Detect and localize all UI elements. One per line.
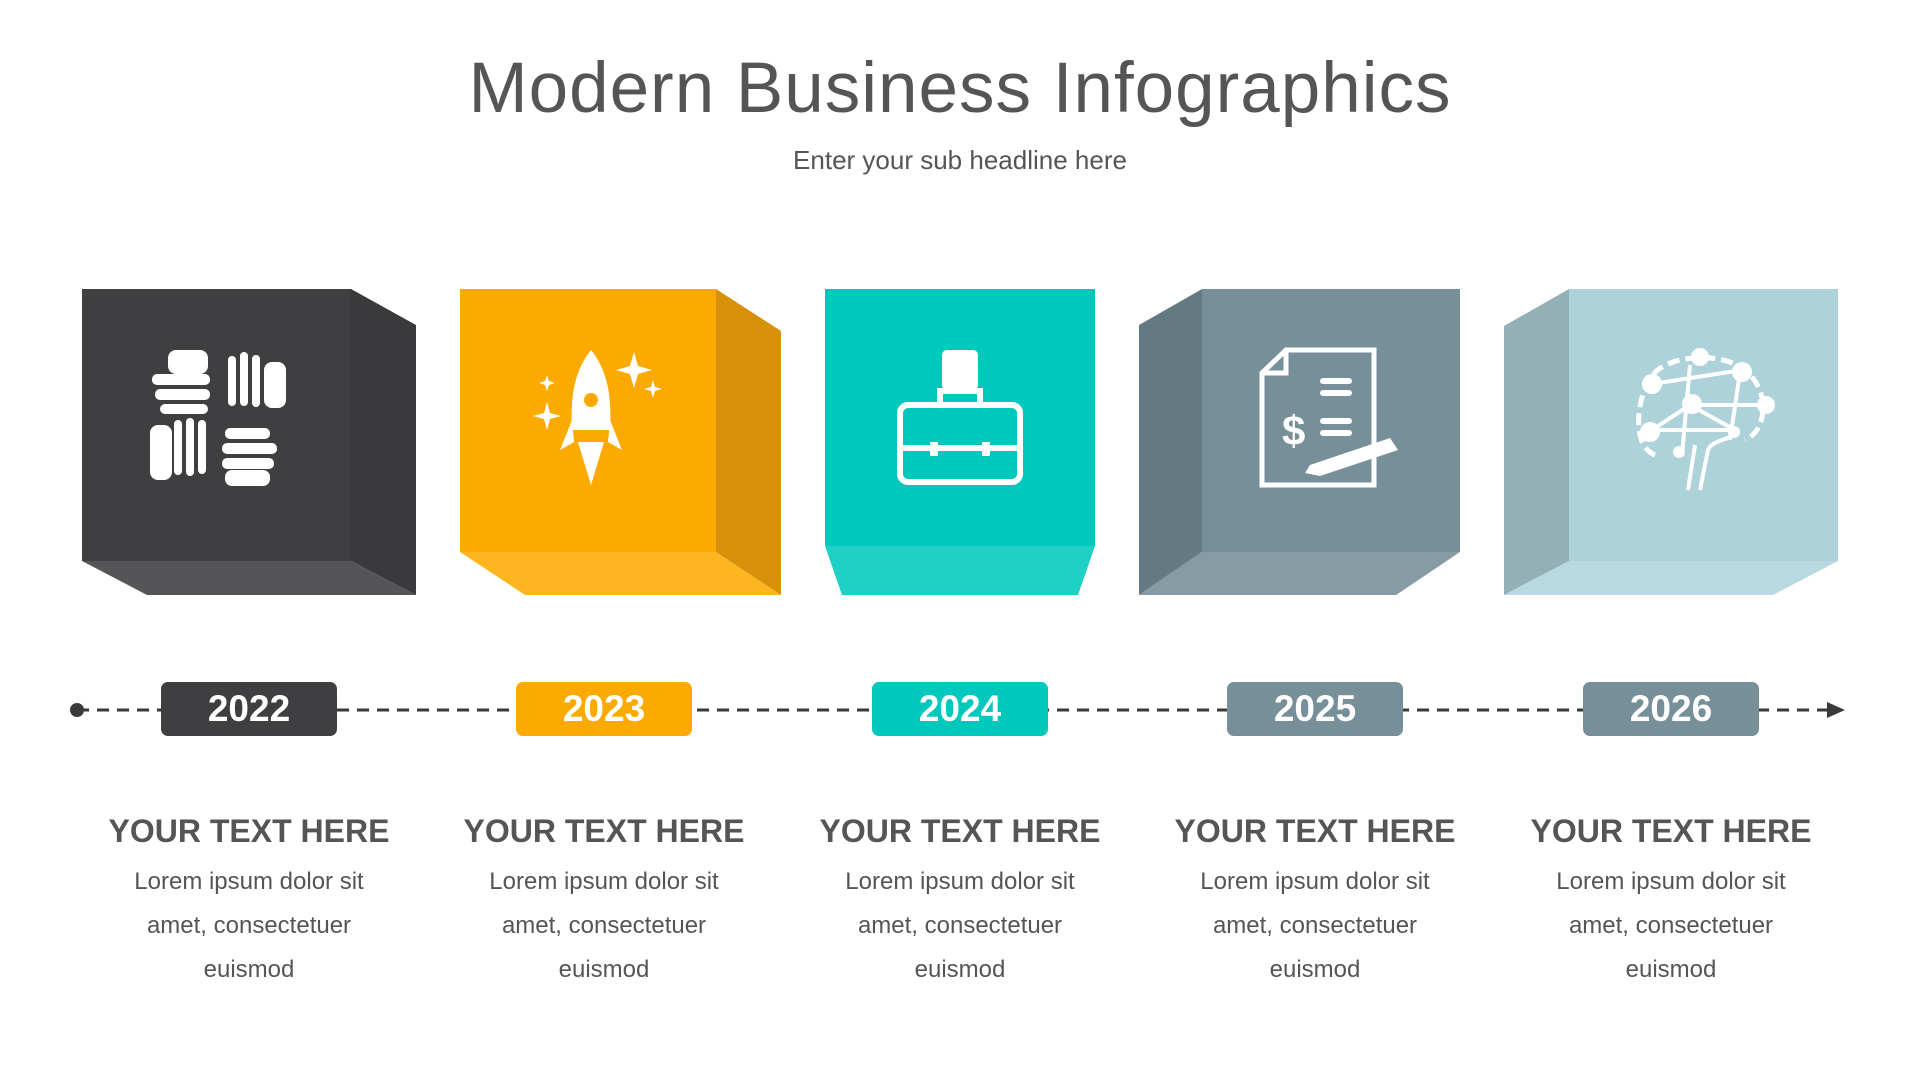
- box 4: slate: [1139, 289, 1460, 595]
- text block 4: euismod: [1270, 956, 1360, 983]
- box 3: teal: [825, 289, 1095, 595]
- box 1: dark: [82, 289, 416, 595]
- text block 2: Lorem ipsum dolor sit: [489, 868, 719, 895]
- icon: brain network: [1639, 348, 1775, 490]
- text block 1: YOUR TEXT HERE: [109, 813, 389, 849]
- text block 2: euismod: [559, 956, 649, 983]
- timeline line with dot and arrow: [70, 702, 1845, 718]
- title: Modern Business Infographics: [468, 49, 1452, 128]
- text block 5: Lorem ipsum dolor sit: [1556, 868, 1786, 895]
- icon: briefcase: [900, 391, 1020, 482]
- text block 1: amet, consectetuer: [147, 912, 351, 939]
- text block 4: [1175, 813, 1455, 983]
- year 2026: 2026: [1630, 688, 1712, 729]
- text block 2: amet, consectetuer: [502, 912, 706, 939]
- text block 3: Lorem ipsum dolor sit: [845, 868, 1075, 895]
- subtitle: Enter your sub headline here: [793, 145, 1127, 175]
- text block 1: [109, 813, 389, 983]
- text block 2: [464, 813, 744, 983]
- text block 5: [1531, 813, 1811, 983]
- year 2025: [1227, 682, 1403, 736]
- text block 1: euismod: [204, 956, 294, 983]
- box 5: light blue: [1504, 289, 1838, 595]
- icon: hands: [150, 350, 286, 486]
- text block 5: amet, consectetuer: [1569, 912, 1773, 939]
- year 2026: [1583, 682, 1759, 736]
- text block 3: YOUR TEXT HERE: [820, 813, 1100, 849]
- boxes with icons: [82, 289, 1838, 595]
- text block 4: amet, consectetuer: [1213, 912, 1417, 939]
- year 2022: 2022: [208, 688, 290, 729]
- year 2023: 2023: [563, 688, 645, 729]
- text block 4: YOUR TEXT HERE: [1175, 813, 1455, 849]
- text block 2: YOUR TEXT HERE: [464, 813, 744, 849]
- text block 3: euismod: [915, 956, 1005, 983]
- year 2025: 2025: [1274, 688, 1356, 729]
- text block 5: YOUR TEXT HERE: [1531, 813, 1811, 849]
- icon: invoice: [1262, 350, 1374, 485]
- text block 3: amet, consectetuer: [858, 912, 1062, 939]
- text block 3: [820, 813, 1100, 983]
- year 2022: [161, 682, 337, 736]
- year 2023: [516, 682, 692, 736]
- icon: rocket: [533, 350, 662, 485]
- year 2024: [872, 682, 1048, 736]
- box 2: orange: [460, 289, 781, 595]
- text block 5: euismod: [1626, 956, 1716, 983]
- box 4: slate: $: [1282, 407, 1305, 454]
- year 2024: 2024: [919, 688, 1001, 729]
- text block 4: Lorem ipsum dolor sit: [1200, 868, 1430, 895]
- text block 1: Lorem ipsum dolor sit: [134, 868, 364, 895]
